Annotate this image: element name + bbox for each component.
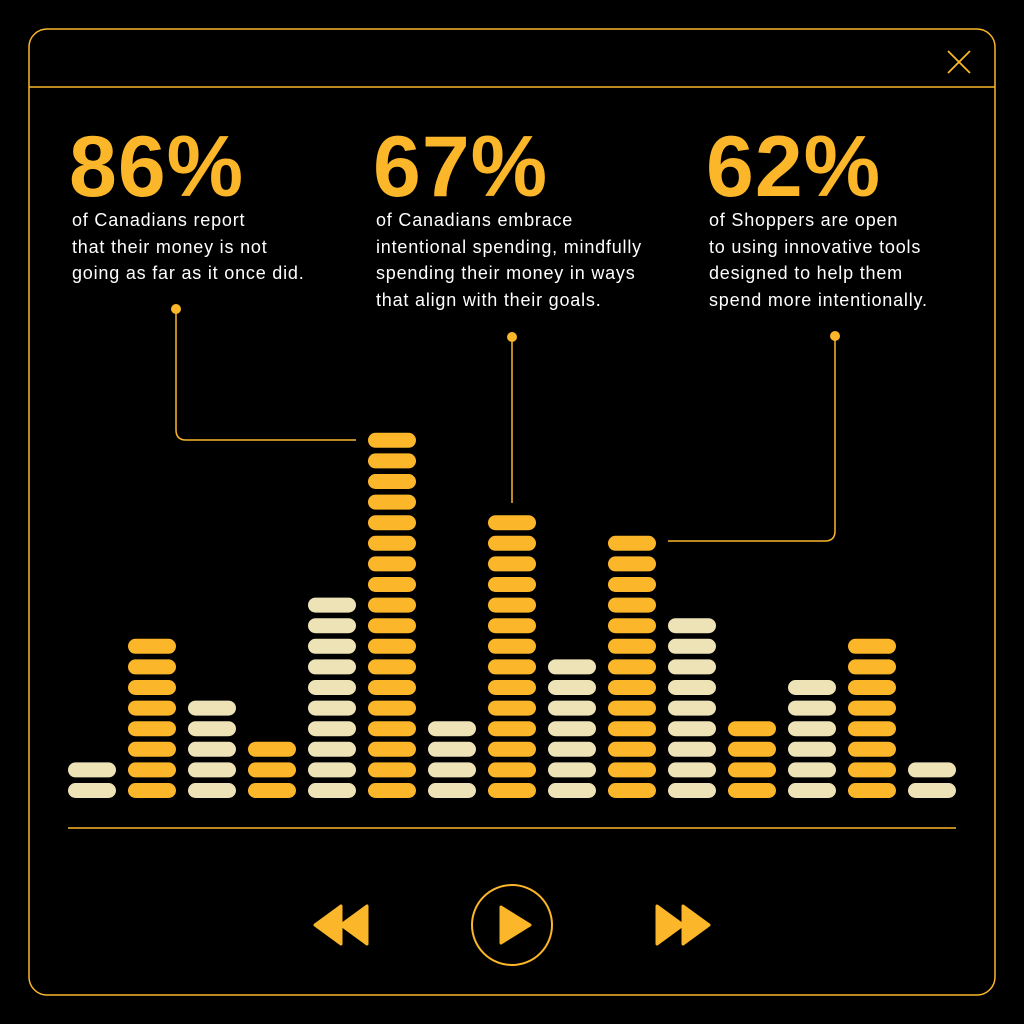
- stat: 67%: of Canadians embrace: [376, 210, 573, 230]
- equalizer columns: [68, 432, 956, 798]
- stat: 67%: spending their money in ways: [376, 263, 636, 283]
- stat: 86%: that their money is not: [72, 236, 268, 256]
- stat: 67%: 67%: [373, 119, 548, 215]
- stat: 67%: intentional spending, mindfully: [376, 236, 642, 256]
- stat: 86%: 86%: [69, 119, 244, 215]
- stat: 62%: to using innovative tools: [709, 236, 921, 256]
- stat: 86%: [69, 119, 305, 283]
- icon: rewind: [315, 906, 367, 944]
- icon: close X: [947, 50, 971, 74]
- stat: 62%: 62%: [706, 119, 881, 215]
- stat: 67%: [373, 119, 642, 310]
- stat: 62%: [706, 119, 928, 310]
- stat: 86%: going as far as it once did.: [72, 263, 305, 283]
- stat: 86%: of Canadians report: [72, 210, 245, 230]
- stat: 62%: of Shoppers are open: [709, 210, 898, 230]
- icon: play button: [472, 885, 552, 965]
- playback controls: [313, 884, 711, 966]
- icon: fast forward: [657, 906, 709, 944]
- stat: 62%: spend more intentionally.: [709, 290, 928, 310]
- stat: 62%: designed to help them: [709, 263, 903, 283]
- stat: 67%: that align with their goals.: [376, 290, 602, 310]
